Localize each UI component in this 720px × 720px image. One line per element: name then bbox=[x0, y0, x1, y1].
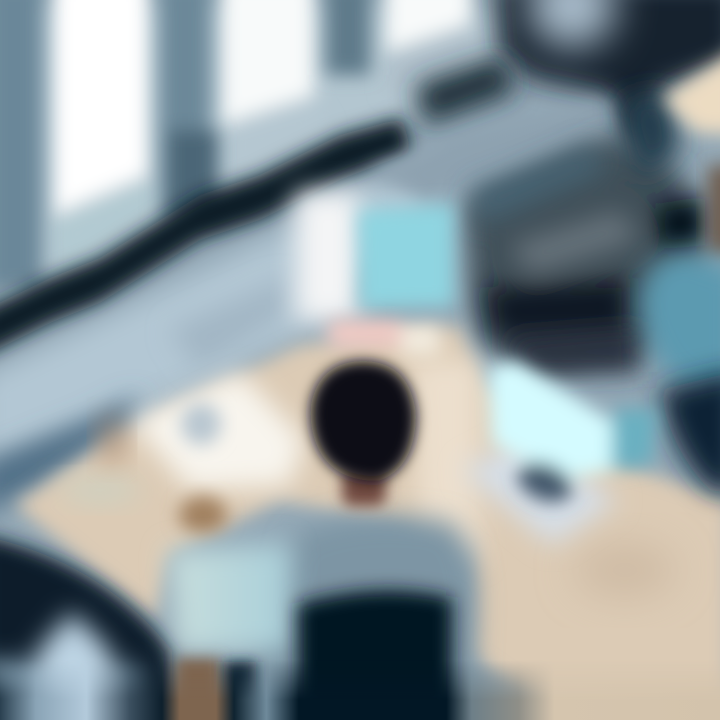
lighter sill upper band bbox=[370, 100, 610, 205]
shaded sill edge bbox=[0, 280, 290, 515]
laptop base bbox=[462, 440, 618, 545]
light patch in dark beam bbox=[528, 0, 616, 48]
lighter desk strip bbox=[410, 360, 480, 560]
pink note and light desk strip bbox=[328, 320, 440, 355]
bottom edge colour strip bbox=[0, 660, 720, 720]
person bbox=[168, 361, 476, 720]
teal cushion at right bbox=[638, 252, 720, 400]
shadow beside forearm bbox=[224, 662, 256, 720]
right dark shelf bbox=[465, 135, 700, 375]
head hair bbox=[311, 361, 416, 481]
chair back bbox=[298, 590, 452, 720]
bottom left chair: dark curve bbox=[0, 535, 172, 720]
left sleeve bbox=[168, 544, 290, 652]
sloped grey sill bbox=[0, 158, 450, 465]
darker wood patch bbox=[575, 544, 675, 596]
brown post bbox=[708, 165, 720, 255]
window sill dark diagonal band bbox=[0, 118, 412, 358]
neck bbox=[342, 470, 386, 506]
top right dark beam bbox=[495, 0, 720, 170]
teal note on wall bbox=[358, 204, 454, 308]
brown shadow near paper bbox=[98, 416, 126, 464]
laptop bbox=[488, 360, 658, 509]
dark band upper segment bbox=[415, 55, 515, 125]
greenish tint on left desk bbox=[60, 476, 140, 504]
window pillars bbox=[0, 0, 370, 290]
grey mark on paper bbox=[181, 403, 221, 445]
glare on wall bbox=[296, 192, 360, 322]
dark cushion base bbox=[660, 370, 720, 495]
chair light interior bbox=[0, 612, 140, 720]
desk surface bbox=[15, 325, 720, 720]
torso shirt bbox=[255, 516, 476, 720]
top right peach wall bbox=[662, 48, 720, 135]
shelf details bbox=[470, 90, 705, 372]
paper on desk bbox=[130, 372, 305, 490]
forearm bbox=[176, 658, 220, 720]
window panes bbox=[50, 0, 480, 275]
brown shadows on desk bbox=[179, 496, 227, 534]
